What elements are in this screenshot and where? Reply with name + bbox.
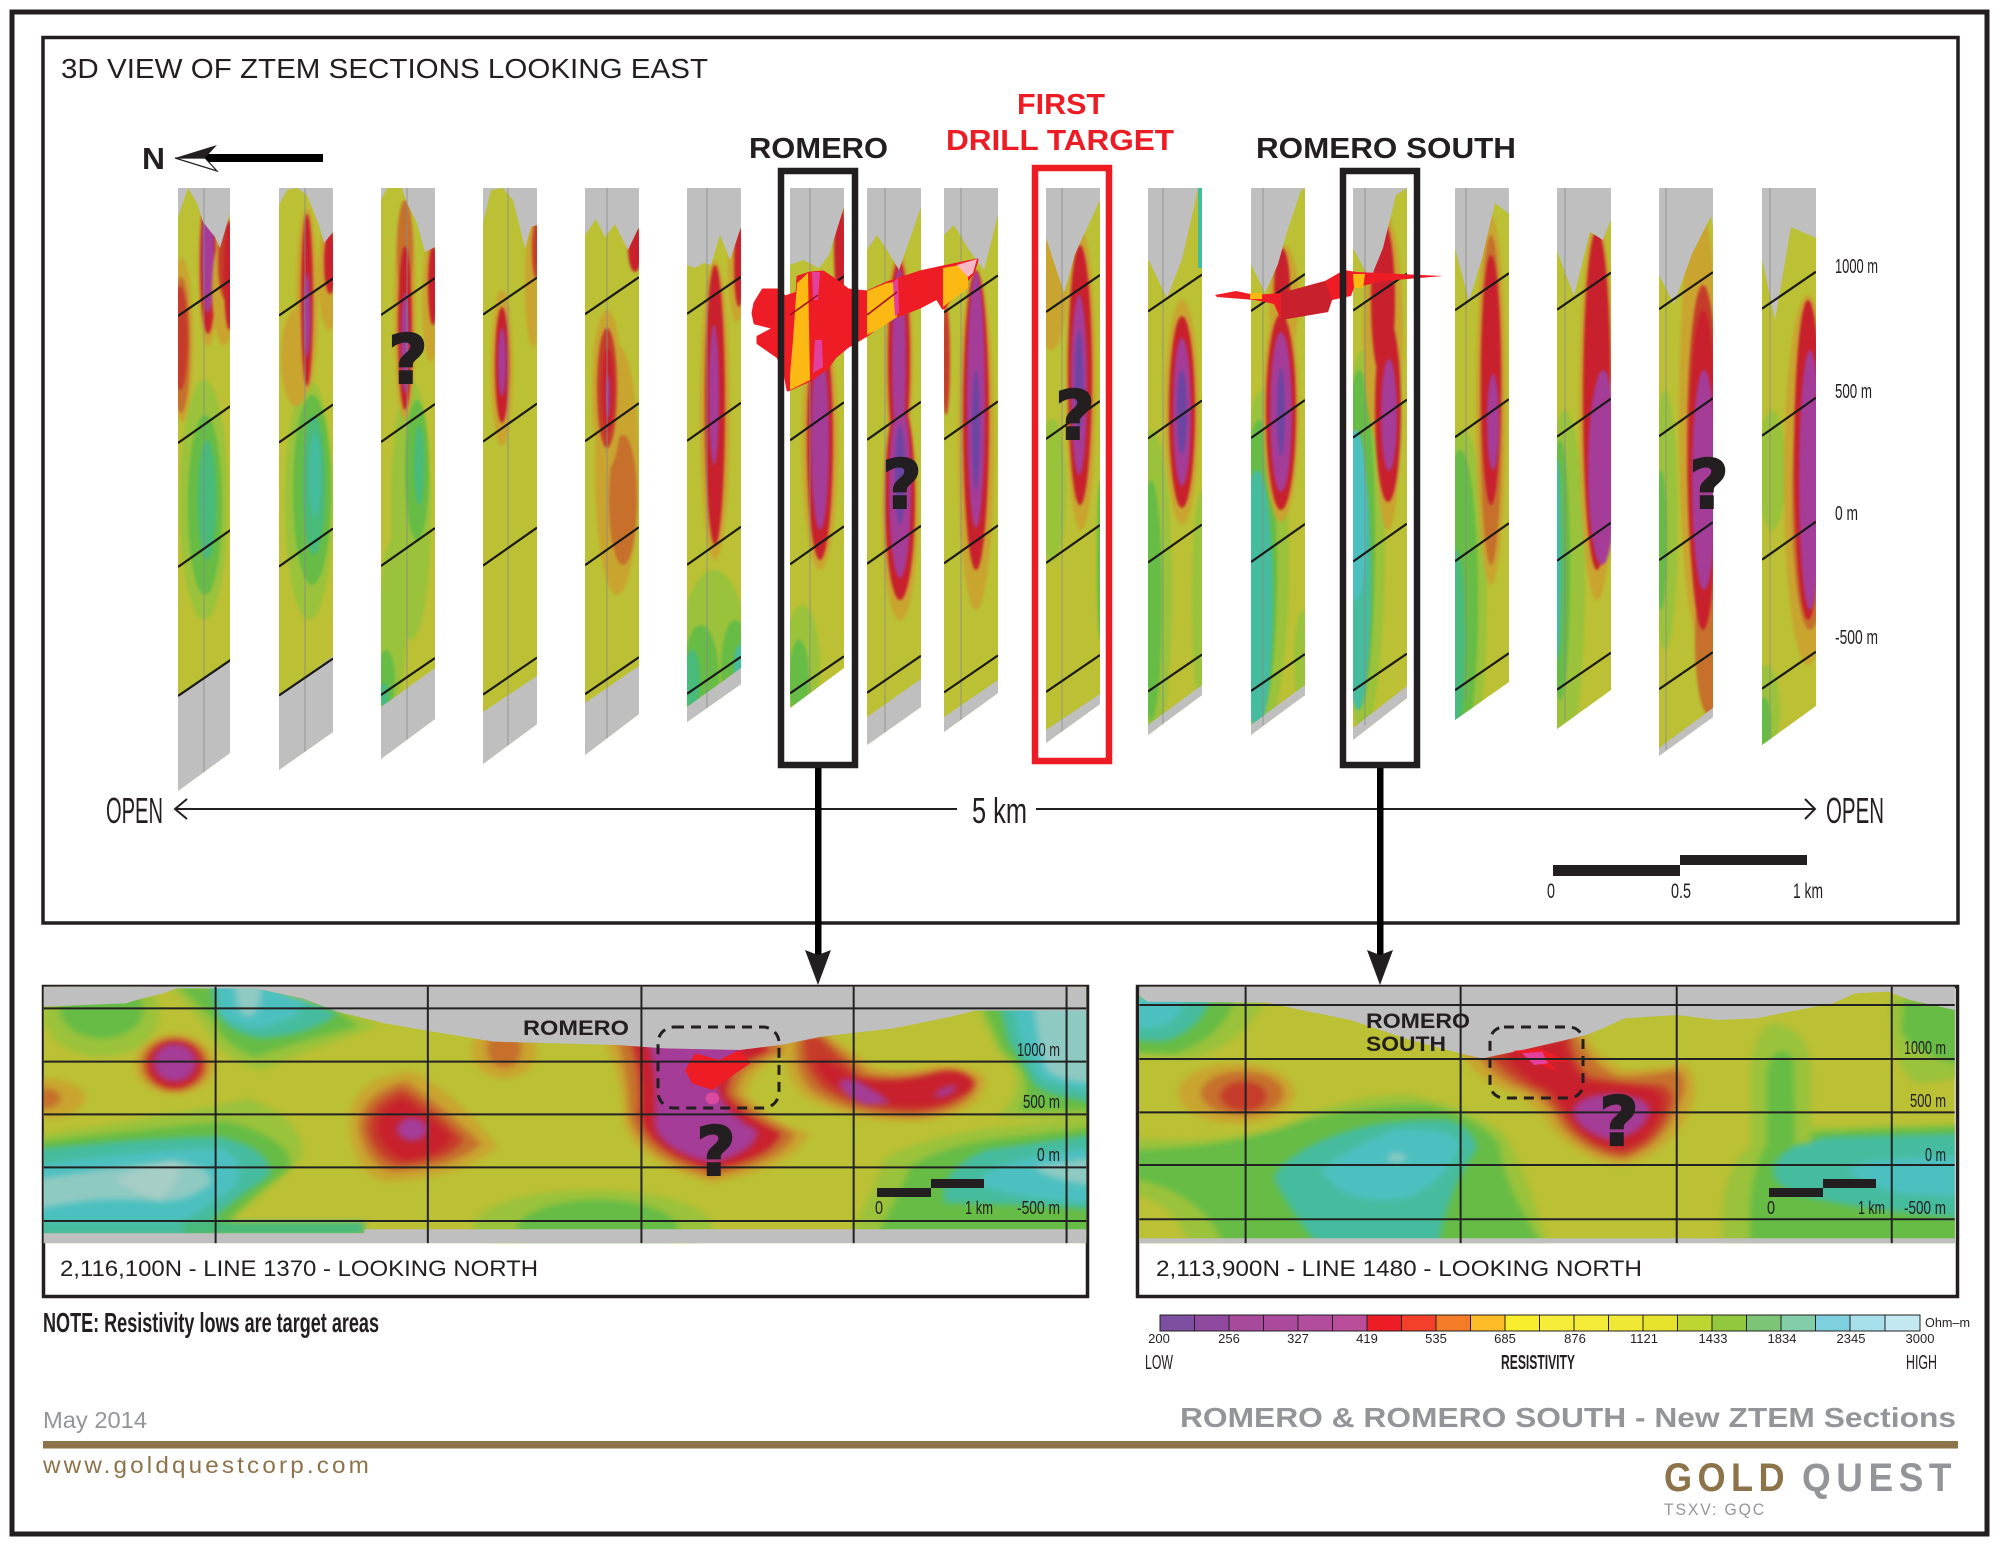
section strip 6 [687,188,741,722]
legend values: 1834 [1768,1331,1796,1346]
arrow: Romero South to section [1367,768,1393,985]
section strip 17 [1762,188,1816,745]
legend values: 876 [1564,1331,1586,1346]
legend values: 1433 [1699,1331,1727,1346]
scale bar: 1 km [1858,1198,1885,1218]
section strip 13: Romero South [1353,188,1407,740]
label: First drill target [946,89,1174,157]
elevation labels: 500 m [1910,1091,1946,1111]
question mark: ? [696,1113,736,1192]
legend values: 2345 [1837,1331,1865,1346]
label: Romero South: SOUTH [1366,1033,1446,1056]
colour ramp [1160,1315,1920,1331]
section strip 11 [1148,188,1202,735]
legend values: 200 [1148,1331,1170,1346]
target box [1490,1027,1583,1098]
logo: GoldQuest: GOLD [1664,1456,1790,1500]
gold divider [43,1441,1958,1448]
legend values: 1121 [1630,1331,1658,1346]
scale bar: 0 [1547,880,1555,903]
question mark: strip 3: ? [388,321,428,400]
label: Romero South [1366,1010,1470,1056]
legend values: 256 [1218,1331,1240,1346]
label: Romero: ROMERO [523,1017,629,1040]
resistivity section: Romero South [1125,987,1967,1245]
section strip 15 [1557,188,1611,729]
question mark: strip 8: ? [882,446,922,525]
caption: 2,116,100N - LINE 1370 - LOOKING NORTH [60,1256,538,1281]
section strip 12 [1251,188,1305,735]
elevation labels: 500 m [1023,1092,1060,1112]
resistivity legend: HIGH [1906,1352,1937,1374]
elevation labels: 1000 m [1017,1040,1060,1060]
3D mineralised body: Romero South [1215,270,1443,320]
elevation labels [1904,1038,1946,1218]
elevation labels: -500 m [1904,1198,1946,1218]
scale bar [875,1179,993,1218]
scale bar: 0 [875,1198,883,1218]
section strip 1 [178,188,230,791]
north arrow [142,141,323,176]
highlight box: Romero [781,171,855,765]
section strip 10: first drill target [1046,188,1100,743]
scale bar: 1 km [1793,880,1823,903]
section strip 4 [483,188,537,764]
section strip 7: Romero [790,188,844,708]
note: NOTE: Resistivity lows are target areas [43,1307,379,1338]
elevation labels: 1000 m [1835,256,1878,278]
legend values: 3000 [1906,1331,1934,1346]
caption: 2,113,900N - LINE 1480 - LOOKING NORTH [1156,1256,1642,1281]
elevation labels: 0 m [1835,503,1858,525]
question mark: strip 16: ? [1689,446,1729,525]
legend values: 419 [1356,1331,1378,1346]
section strip 5 [585,188,639,755]
section strip 16 [1659,188,1713,756]
north arrow: N [142,141,165,176]
section strip 8 [867,188,921,745]
highlight box: first drill target [1035,168,1109,761]
elevation labels: -500 m [1017,1198,1060,1218]
5 km extent arrow [106,790,1884,831]
section strip 9 [944,188,998,732]
elevation labels: -500 m [1835,627,1878,649]
legend values [1148,1331,1934,1346]
target box [658,1027,779,1108]
panel: Line 1480 section [1125,986,1967,1296]
label: Romero South: ROMERO SOUTH [1256,133,1516,165]
panel: Line 1370 section [3,970,1101,1296]
legend values: 685 [1494,1331,1516,1346]
elevation labels [1835,256,1878,649]
5 km extent arrow: 5 km [972,790,1027,831]
3D mineralised body: Romero [753,259,977,390]
label: Romero: ROMERO [749,133,888,165]
resistivity legend: Ohm–m [1925,1315,1970,1330]
elevation labels: 500 m [1835,381,1872,403]
logo: GoldQuest: TSXV: GQC [1664,1500,1766,1519]
label: Romero South: ROMERO [1366,1010,1470,1033]
logo: GoldQuest: QUEST [1802,1456,1957,1500]
logo: GoldQuest [1664,1456,1957,1519]
label: First drill target: DRILL TARGET [946,125,1174,157]
footer title: ROMERO & ROMERO SOUTH - New ZTEM Sections [1180,1402,1956,1433]
elevation labels: 1000 m [1904,1038,1946,1058]
resistivity legend [1145,1315,1970,1374]
question mark: ? [1599,1083,1639,1162]
scale bar: 0.5 [1671,880,1691,903]
section strip 2 [279,188,333,770]
scale bar: 1 km [965,1198,993,1218]
legend values: 535 [1425,1331,1447,1346]
highlight box: Romero South [1343,171,1417,765]
5 km extent arrow: OPEN [1826,790,1884,831]
question mark: strip 10: ? [1055,377,1095,456]
elevation labels: 0 m [1037,1145,1060,1165]
resistivity section: Romero [3,970,1101,1263]
arrow: Romero to section [805,768,831,985]
resistivity legend: LOW [1145,1352,1173,1374]
elevation labels: 0 m [1925,1145,1946,1165]
scale bar [1767,1179,1885,1218]
date: May 2014 [43,1407,147,1433]
heading: 3D view: 3D VIEW OF ZTEM SECTIONS LOOKING EAST [61,53,708,84]
website: www.goldquestcorp.com [42,1452,372,1478]
5 km extent arrow: OPEN [106,790,163,831]
elevation labels [1017,1040,1060,1218]
resistivity legend: RESISTIVITY [1501,1352,1575,1374]
panel: 3D view of ZTEM sections [43,38,1958,988]
section strip 3 [381,188,435,759]
legend values: 327 [1287,1331,1309,1346]
scale bar [1547,855,1823,903]
label: First drill target: FIRST [1017,89,1105,121]
scale bar: 0 [1767,1198,1775,1218]
section strip 14 [1455,188,1509,720]
